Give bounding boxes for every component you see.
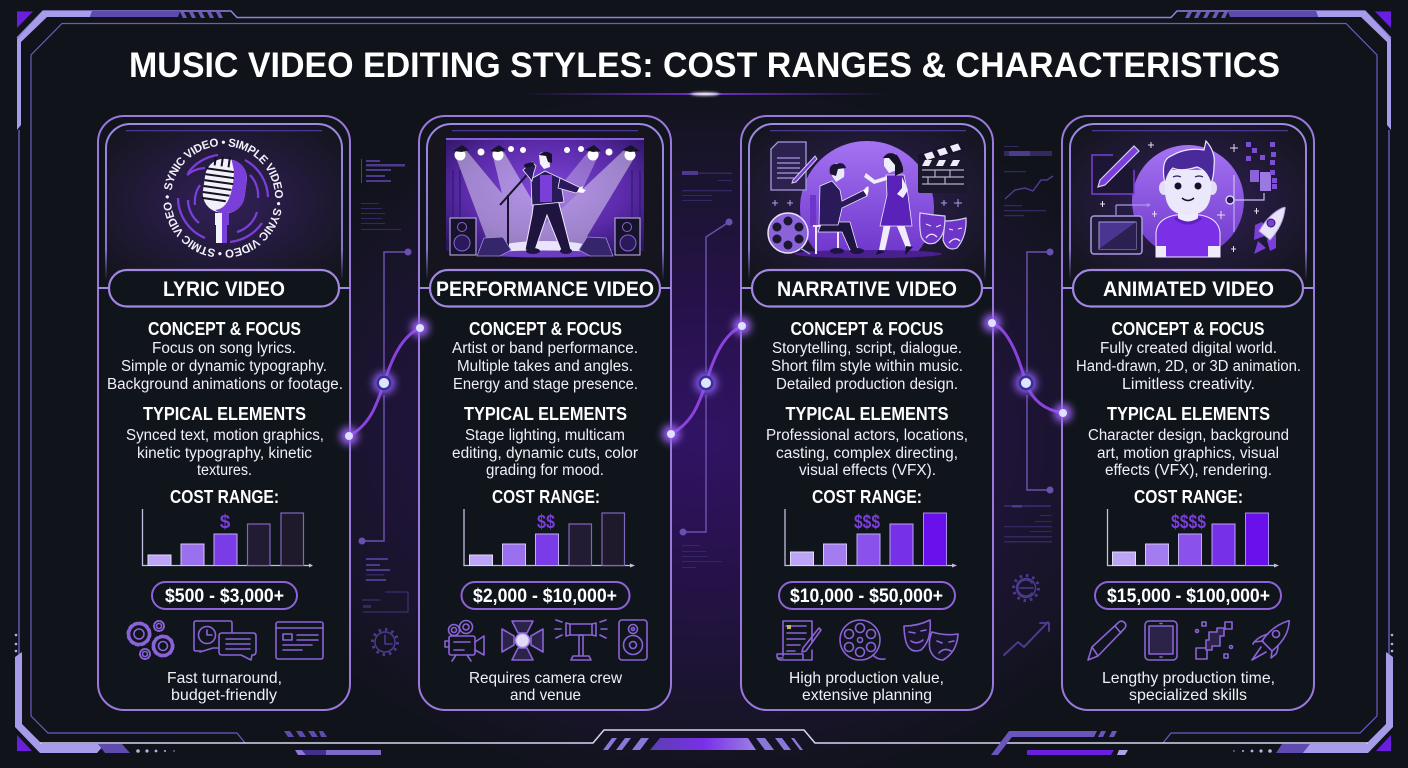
title underline glow — [520, 92, 890, 96]
script page — [771, 142, 817, 190]
concept and focus text: Focus on song lyrics. — [152, 340, 296, 357]
rocket — [1254, 207, 1285, 254]
typical elements text: TYPICAL ELEMENTS — [1107, 404, 1270, 424]
typical elements text: textures. — [197, 462, 252, 479]
concept and focus text — [107, 319, 343, 393]
drawback note — [167, 670, 282, 704]
gutter circuitry 2 — [680, 171, 732, 568]
clapperboard — [918, 141, 967, 193]
bar chart: cost — [464, 509, 635, 568]
bar chart: cost: $ — [220, 512, 231, 533]
bar chart: cost — [1108, 509, 1279, 568]
card title pill: LYRIC VIDEO — [163, 278, 285, 301]
concept and focus text: Limitless creativity. — [1122, 376, 1255, 393]
drawback note: and venue — [510, 687, 581, 704]
card title pill — [419, 270, 671, 306]
typical elements text — [126, 404, 324, 479]
typical elements text: TYPICAL ELEMENTS — [143, 404, 306, 424]
drawback note: Lengthy production time, — [1102, 670, 1275, 687]
icon row — [777, 620, 958, 660]
connector: card 2 to card 3 — [662, 317, 751, 443]
typical elements text: Stage lighting, multicam — [465, 427, 625, 444]
drawback note — [469, 670, 622, 704]
card title pill — [1062, 270, 1314, 306]
speakers — [450, 218, 640, 256]
cost range heading: COST RANGE: — [812, 487, 922, 507]
concept and focus text: Background animations or footage. — [107, 376, 343, 393]
drawback note: High production value, — [789, 670, 944, 687]
concept and focus text — [1076, 319, 1301, 393]
icon row — [1088, 621, 1289, 660]
drawback note — [1102, 670, 1275, 704]
panel: lyric video — [97, 115, 351, 711]
drawback note: specialized skills — [1129, 687, 1247, 704]
typical elements text: TYPICAL ELEMENTS — [786, 404, 948, 424]
pencil frame — [1092, 146, 1139, 194]
standing woman — [864, 153, 913, 255]
icon: gear mark — [1014, 576, 1038, 600]
typical elements text: Character design, background — [1088, 427, 1289, 444]
concept and focus text: CONCEPT & FOCUS — [148, 319, 301, 339]
concept and focus text: CONCEPT & FOCUS — [790, 319, 944, 339]
bar chart: cost: $$ — [537, 512, 555, 533]
concept and focus text: Energy and stage presence. — [453, 376, 638, 393]
theatre masks — [920, 213, 966, 249]
typical elements text: kinetic typography, kinetic — [137, 445, 312, 462]
panel: performance video — [419, 116, 671, 710]
panel: animated video — [1062, 116, 1314, 710]
icon row — [445, 620, 647, 661]
drawback note: Requires camera crew — [469, 670, 622, 687]
price pill: $10,000 - $50,000+ — [790, 585, 943, 607]
character — [1156, 141, 1220, 257]
concept and focus text: Fully created digital world. — [1100, 340, 1277, 357]
typical elements text — [452, 404, 638, 479]
tablet — [1091, 203, 1151, 254]
panel: narrative video — [741, 116, 993, 710]
drawback note: Fast turnaround, — [167, 670, 282, 687]
pixel cluster — [1246, 142, 1277, 191]
price pill: $500 - $3,000+ — [165, 585, 284, 607]
card title pill — [741, 270, 993, 306]
icon: trend arrow — [1004, 622, 1049, 655]
title: MUSIC VIDEO EDITING STYLES: COST RANGES & CHARACTERISTICS — [129, 46, 1280, 85]
concept and focus text: Simple or dynamic typography. — [121, 358, 327, 375]
illustration: stage performer — [446, 138, 644, 258]
card title pill — [98, 270, 350, 306]
typical elements text: TYPICAL ELEMENTS — [464, 404, 627, 424]
gutter circuitry 1 — [358, 159, 412, 612]
bar chart: cost — [785, 509, 957, 568]
icon: gear clock — [372, 630, 398, 654]
icon row — [128, 621, 323, 660]
concept and focus text: CONCEPT & FOCUS — [469, 319, 622, 339]
drawback note — [789, 670, 944, 704]
performer figure — [523, 152, 586, 254]
bar chart: cost: $$$ — [854, 512, 880, 533]
price pill: $2,000 - $10,000+ — [473, 585, 617, 607]
concept and focus text: Multiple takes and angles. — [457, 358, 633, 375]
connector: card 1 to card 2 — [340, 319, 429, 445]
concept and focus text: Hand-drawn, 2D, or 3D animation. — [1076, 358, 1301, 375]
concept and focus text: Detailed production design. — [776, 376, 958, 393]
typical elements text: effects (VFX), rendering. — [1105, 462, 1272, 479]
typical elements text: Professional actors, locations, — [766, 427, 968, 444]
typical elements text: visual effects (VFX). — [799, 462, 936, 479]
cost range heading: COST RANGE: — [492, 487, 600, 507]
connector: card 3 to card 4 — [983, 314, 1072, 422]
drawback note: extensive planning — [802, 687, 932, 704]
card title pill: NARRATIVE VIDEO — [777, 278, 957, 301]
concept and focus text: Short film style within music. — [771, 358, 963, 375]
concept and focus text: Storytelling, script, dialogue. — [772, 340, 962, 357]
cost range heading: COST RANGE: — [1134, 487, 1243, 507]
film reel — [768, 213, 810, 254]
cost range heading: COST RANGE: — [170, 487, 279, 507]
typical elements text: casting, complex directing, — [776, 445, 958, 462]
price pill: $15,000 - $100,000+ — [1107, 585, 1270, 607]
typical elements text — [766, 404, 968, 479]
seated man — [810, 163, 868, 254]
concept and focus text — [771, 319, 963, 393]
gutter circuitry 3 — [1004, 146, 1054, 542]
typical elements text: editing, dynamic cuts, color — [452, 445, 638, 462]
illustration: animated character and tools — [1091, 141, 1285, 257]
typical elements text: art, motion graphics, visual — [1097, 445, 1279, 462]
card title pill: ANIMATED VIDEO — [1103, 278, 1274, 301]
illustration: actors and film props — [768, 141, 967, 258]
bar chart: cost — [142, 509, 313, 568]
drawback note: budget-friendly — [171, 687, 277, 704]
typical elements text — [1088, 404, 1289, 479]
concept and focus text: CONCEPT & FOCUS — [1112, 319, 1264, 339]
card title pill: PERFORMANCE VIDEO — [436, 278, 654, 301]
typical elements text: grading for mood. — [486, 462, 604, 479]
illustration: microphone badge: SYNIC VIDEO • SIMPLE VIDEO • SYNIC VIDEO • STMIC VIDEO • — [164, 138, 283, 258]
typical elements text: Synced text, motion graphics, — [126, 427, 324, 444]
bar chart: cost: $$$$ — [1171, 512, 1206, 533]
concept and focus text — [452, 319, 638, 393]
concept and focus text: Artist or band performance. — [452, 340, 638, 357]
